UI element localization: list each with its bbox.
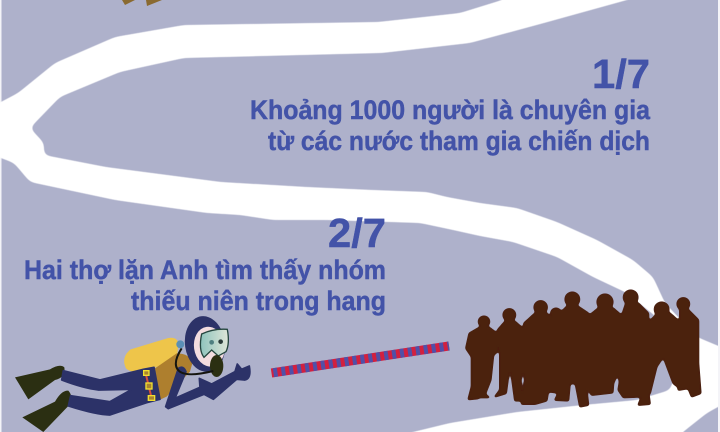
mask <box>200 329 228 357</box>
backpack <box>155 353 192 400</box>
section 1/7 text: từ các nước tham gia chiến dịch <box>268 126 650 156</box>
striped line <box>272 346 449 373</box>
legs and torso <box>62 367 160 415</box>
silhouettes: group of boys <box>466 290 701 407</box>
air tank <box>124 338 178 372</box>
arm <box>166 364 250 409</box>
belt <box>144 371 155 400</box>
icon: scuba diver <box>15 313 250 432</box>
section 1/7 text: 1/7 <box>592 51 650 97</box>
section 2/7 text: 2/7 <box>328 210 386 256</box>
face <box>191 325 227 369</box>
helmet <box>181 313 229 375</box>
regulator <box>210 355 223 377</box>
section 2/7 text: Hai thợ lặn Anh tìm thấy nhóm <box>24 255 386 285</box>
section 1/7 text <box>250 51 651 156</box>
fins <box>15 366 71 432</box>
icon: diver fins cut off at top <box>122 0 162 6</box>
hose <box>176 348 213 374</box>
section 1/7 text: Khoảng 1000 người là chuyên gia <box>250 95 651 125</box>
section 2/7 text: thiếu niên trong hang <box>131 286 386 316</box>
section 2/7 text <box>24 210 386 316</box>
